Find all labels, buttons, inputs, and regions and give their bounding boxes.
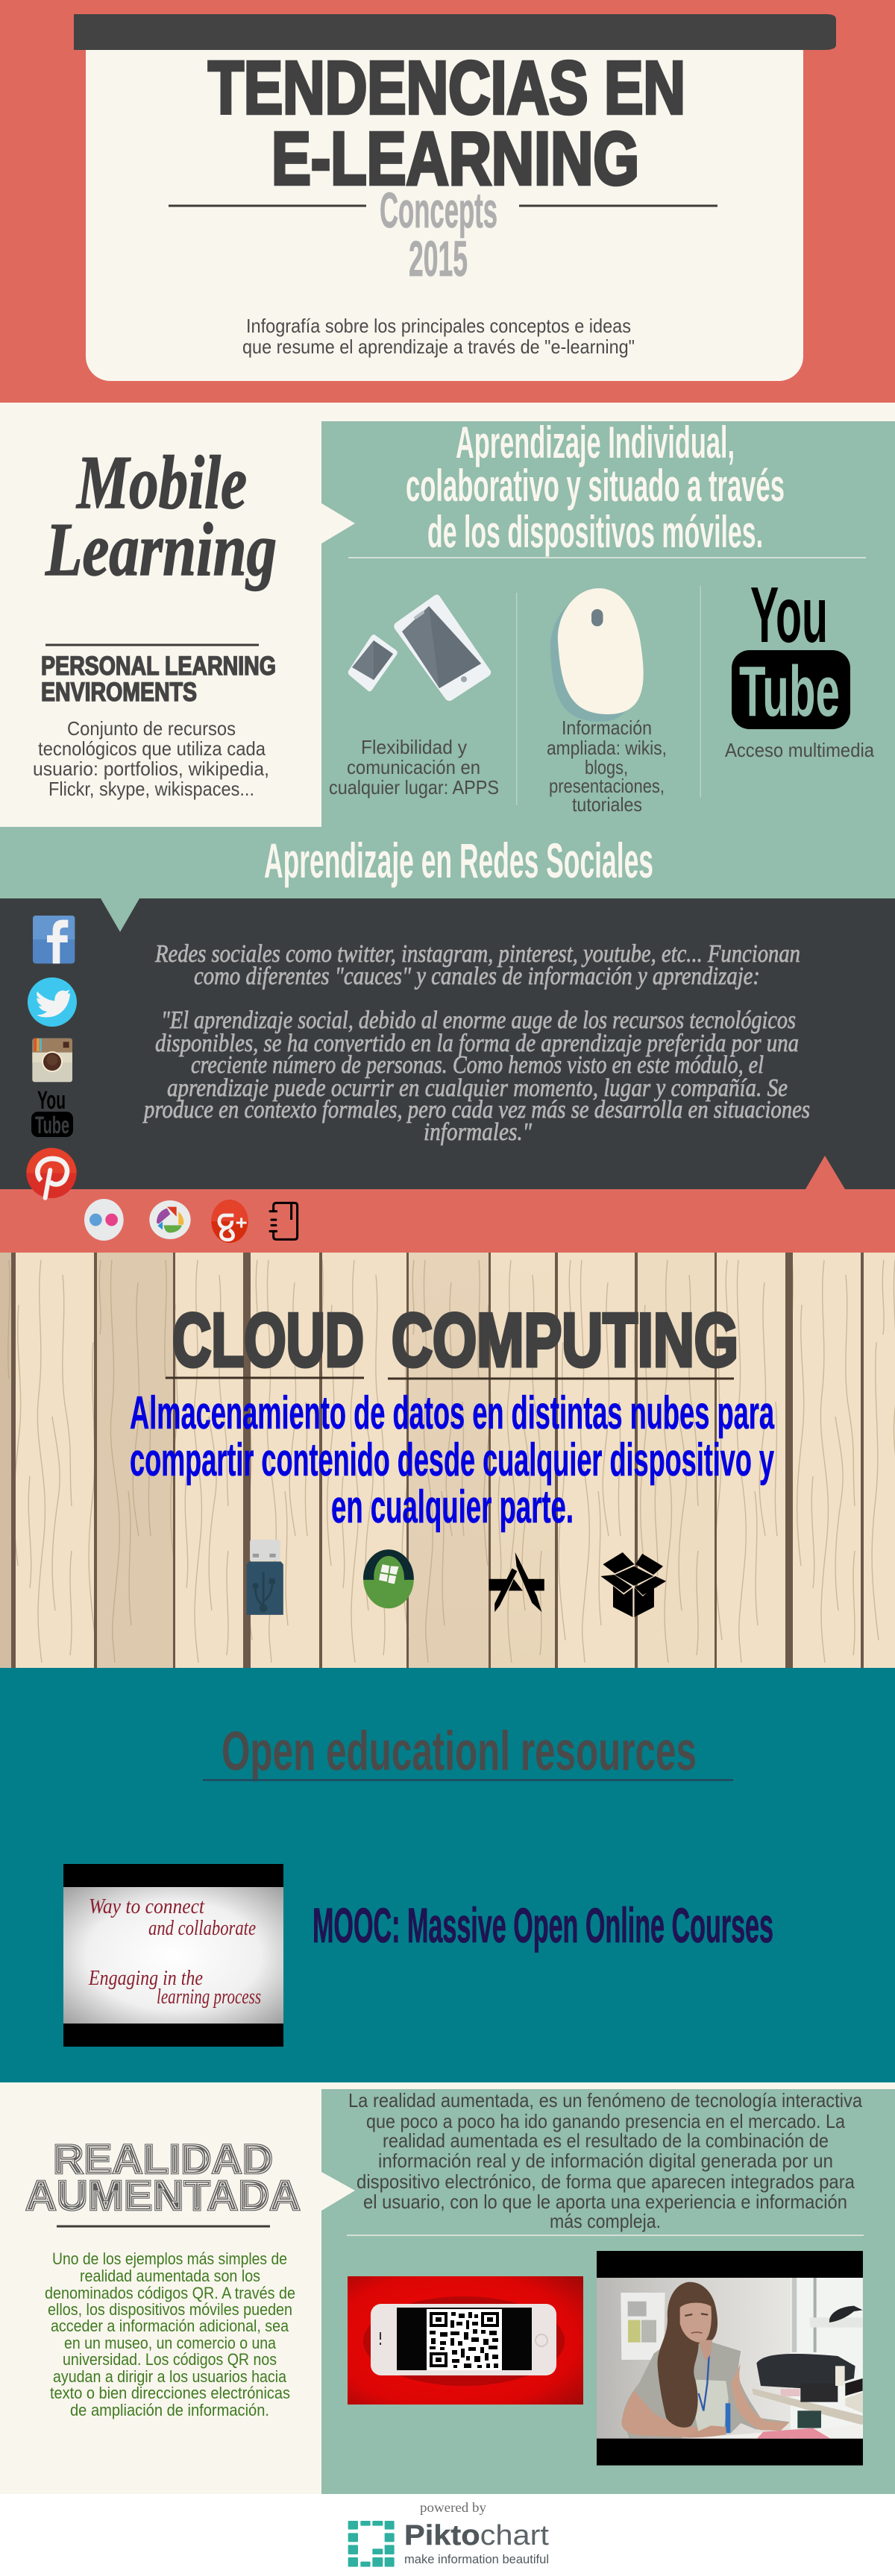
information text [547,717,667,816]
piktochart wordmark: Piktochart [404,2520,549,2551]
intro text: que resume el aprendizaje a través de "e-learning" [242,336,635,358]
realidad aumentada heading [25,2135,301,2220]
intro text: Infografía sobre los principales conceptos e ideas [246,315,631,337]
cloud computing heading [172,1299,738,1382]
video thumbnail [63,1864,283,2047]
icon: youtube [732,571,850,731]
video still [597,2251,863,2466]
mobile learning heading: Learning [45,508,277,592]
qr description text [45,2249,295,2419]
video thumbnail: Engaging in the [88,1967,203,1990]
flexibility text: Flexibilidad y [361,736,467,758]
cloud computing heading: COMPUTING [392,1299,738,1382]
video thumbnail: and collaborate [148,1917,256,1940]
realidad aumentada text: dispositivo electrónico, de forma que aparecen integrados para [357,2170,855,2193]
social learning text: como diferentes "cauces" y canales de información y aprendizaje: [194,963,760,990]
realidad aumentada text: que poco a poco ha ido ganando presencia en el mercado. La [366,2110,845,2132]
panel: realidad aumentada [0,2082,895,2494]
qr description text: ellos, los dispositivos móviles pueden [48,2300,292,2319]
qr code photo [348,2276,583,2405]
header card [86,45,803,381]
video thumbnail: Way to connect [89,1895,205,1918]
information text: presentaciones, [549,775,665,797]
powered by: powered by [420,2500,486,2515]
icon: twitter [28,977,77,1027]
icon: google plus [211,1200,248,1243]
icon: phone and tablet [348,595,491,701]
social learning text: informales." [424,1118,533,1146]
qr description text: acceder a información adicional, sea [51,2317,289,2335]
cloud computing text: en cualquier parte. [331,1481,574,1533]
icon: mouse [550,588,644,722]
qr description text: en un museo, un comercio o una [64,2334,277,2352]
piktochart wordmark [404,2520,549,2566]
panel: footer [0,2494,895,2576]
header dark bar [74,14,836,50]
video thumbnail: learning process [157,1985,261,2009]
icon: youtube small [31,1086,73,1139]
flexibility text [329,736,499,799]
mobile learning heading [45,441,277,592]
qr description text: de ampliación de información. [70,2401,269,2419]
piktochart wordmark: make information beautiful [404,2552,549,2566]
realidad aumentada text: realidad aumentada es el resultado de la combinación de [383,2129,829,2152]
information text: blogs, [585,756,628,778]
qr description text: Uno de los ejemplos más simples de [52,2249,287,2268]
arrow [321,2172,355,2211]
cloud computing text [130,1388,774,1533]
icon: flickr [84,1199,124,1241]
panel: cloud computing [0,1253,895,1668]
mobile learning heading: Mobile [75,441,247,525]
personal learning description [33,717,269,800]
personal learning description: tecnológicos que utiliza cada [38,737,266,760]
icon: youtube small: Tube [35,1112,69,1139]
icon: facebook [33,916,75,963]
personal learning heading [41,652,276,707]
subtitle: 2015 [409,231,468,287]
personal learning description: Flickr, skype, wikispaces... [48,778,254,800]
icon: windows [363,1549,414,1608]
multimedia text: Acceso multimedia [725,739,874,761]
personal learning description: Conjunto de recursos [67,717,236,740]
flexibility text: comunicación en [347,756,480,778]
realidad aumentada text: el usuario, con lo que le aporta una experiencia e información [363,2191,847,2213]
personal learning heading: PERSONAL LEARNING [41,652,276,681]
realidad aumentada heading: REALIDAD [53,2135,273,2182]
arrow [321,503,355,544]
personal learning description: usuario: portfolios, wikipedia, [33,758,269,780]
flexibility text: cualquier lugar: APPS [329,776,499,799]
information text: ampliada: wikis, [547,737,667,759]
qr description text: denominados códigos QR. A través de [45,2284,295,2302]
qr description text: ayudan a dirigir a los usuarios hacia [53,2367,287,2386]
realidad aumentada text: más compleja. [550,2210,661,2232]
qr description text: texto o bien direcciones electrónicas [50,2384,290,2402]
icon: notebook [270,1203,298,1239]
cloud computing heading: CLOUD [172,1299,364,1382]
panel: open educational resources [0,1668,895,2082]
subtitle [380,183,497,287]
icon: pinterest [26,1148,77,1198]
social learning text: aprendizaje puede ocurrir en cualquier momento, lugar y compañía. Se [167,1074,788,1102]
icon: usb [247,1540,283,1615]
piktochart logo [348,2521,395,2567]
personal learning heading: ENVIROMENTS [41,678,197,707]
information text: tutoriales [572,793,642,816]
icon: instagram [32,1039,72,1082]
title: E-LEARNING [271,117,639,201]
panel: redes sociales [0,898,895,1253]
panel: mobile learning [0,403,895,898]
title [208,46,685,201]
qr description text: realidad aumentada son los [80,2267,260,2285]
subtitle: Concepts [380,183,497,239]
icon: youtube: You [750,571,828,659]
intro text [242,315,635,358]
social learning text: disponibles, se ha convertido en la forma de aprendizaje preferida por una [155,1030,799,1057]
realidad aumentada text [348,2089,862,2232]
social learning text [142,940,810,1146]
icon: app store [489,1552,544,1612]
qr description text: universidad. Los códigos QR nos [63,2350,277,2369]
panel: header [0,0,895,403]
realidad aumentada heading: AUMENTADA [25,2172,301,2220]
mobile heading right [406,418,785,557]
realidad aumentada text: información real y de información digital generada por un [378,2150,833,2172]
title: TENDENCIAS EN [208,46,685,130]
icon: box [600,1552,666,1617]
social learning text: creciente número de personas. Como hemos visto en este módulo, el [191,1051,764,1079]
icon: youtube small: You [37,1086,66,1115]
icon: picasa [149,1200,191,1239]
information text: Información [562,717,652,739]
